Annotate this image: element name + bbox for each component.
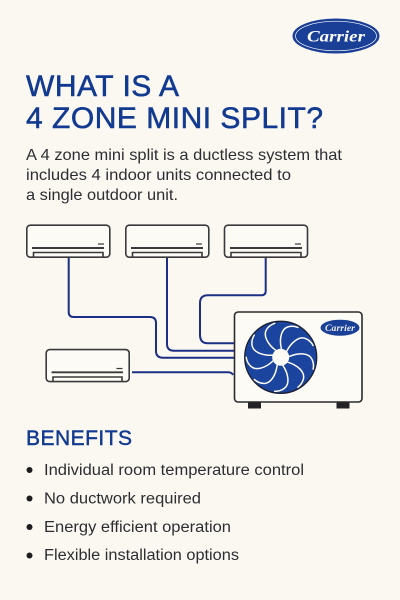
fan bbox=[245, 321, 318, 395]
benefit 2: No ductwork required bbox=[44, 490, 201, 508]
benefit 3: Energy efficient operation bbox=[44, 519, 231, 536]
intro text block: includes 4 indoor units connected to bbox=[26, 167, 291, 184]
benefits heading: BENEFITS bbox=[26, 427, 132, 450]
indoor unit 1 bbox=[27, 225, 110, 257]
title: WHAT IS A bbox=[26, 70, 179, 103]
logo: Carrier header oval: Carrier bbox=[307, 28, 366, 46]
intro text block: a single outdoor unit. bbox=[26, 187, 178, 204]
intro text block: A 4 zone mini split is a ductless system that bbox=[26, 147, 343, 164]
title: 4 ZONE MINI SPLIT? bbox=[26, 102, 323, 135]
logo: Carrier header oval bbox=[293, 19, 379, 53]
unit feet bbox=[248, 402, 350, 408]
refrigerant pipes bbox=[69, 258, 266, 375]
indoor unit 4 bbox=[46, 350, 129, 382]
indoor unit 3 bbox=[224, 225, 308, 257]
benefit 4: Flexible installation options bbox=[44, 547, 239, 564]
outdoor unit logo: Carrier bbox=[325, 323, 356, 333]
intro text block bbox=[26, 147, 343, 204]
outdoor unit bbox=[234, 312, 362, 408]
benefits list bbox=[26, 462, 304, 564]
benefit 1: Individual room temperature control bbox=[44, 462, 304, 479]
indoor unit 2 bbox=[126, 225, 209, 257]
title bbox=[26, 70, 323, 135]
